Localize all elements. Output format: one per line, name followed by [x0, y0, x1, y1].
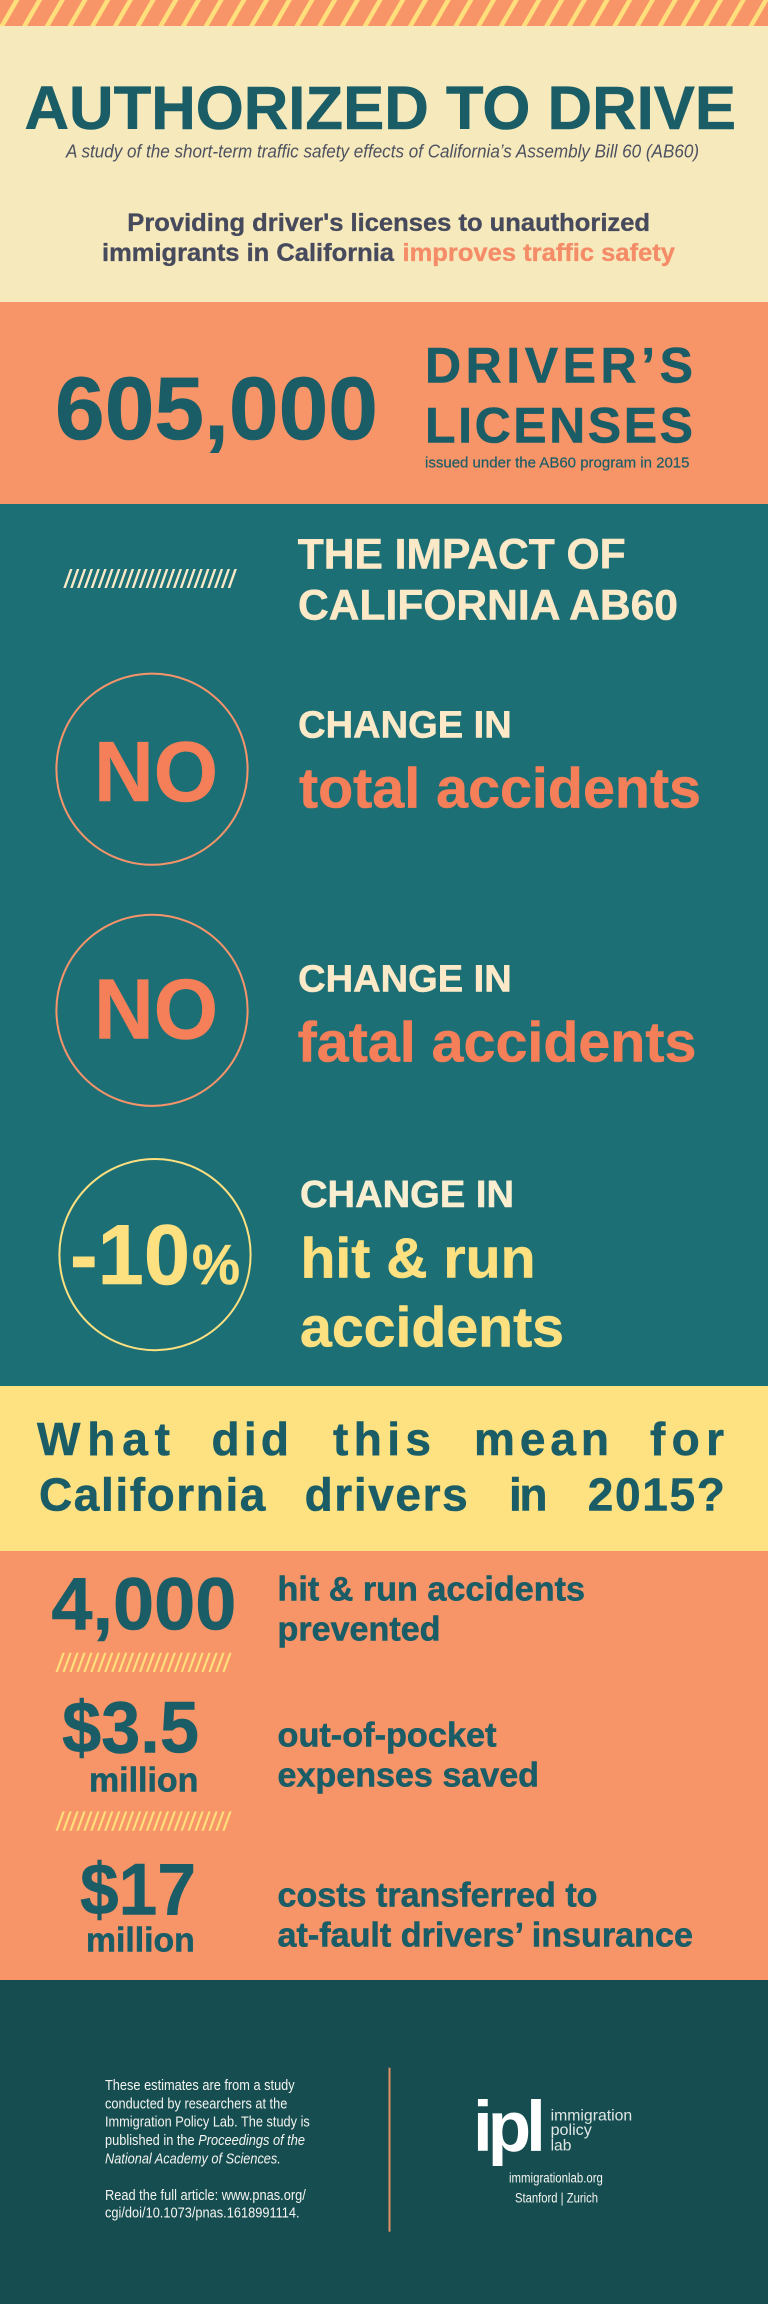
subtitle: A study of the short-term traffic safety effects of California’s Assembly Bill 60 (AB60) [65, 142, 699, 162]
key finding statement [102, 209, 675, 267]
heading: drivers [305, 1469, 468, 1521]
source text: cgi/doi/10.1073/pnas.1618991114. [105, 2206, 300, 2222]
big number: 605,000: 605,000 [55, 358, 378, 458]
stat: $3.5 million out-of-pocket expenses saved: out-of-pocket [278, 1717, 496, 1755]
label: hit and run accidents: hit & run [300, 1226, 536, 1290]
website and affiliations [509, 2171, 603, 2206]
stat: -10% change in hit and run accidents [59, 1159, 564, 1359]
circle badge: NO: NO [94, 963, 218, 1058]
vertical divider [388, 2068, 390, 2232]
circle badge: NO [56, 915, 248, 1106]
source text [105, 2078, 310, 2222]
label: hit and run accidents: accidents [300, 1295, 564, 1359]
circle badge: -10%: -10 [70, 1208, 190, 1303]
stat: $17 million costs transferred: costs transferred to [278, 1877, 598, 1915]
panel: results for drivers [0, 1551, 768, 1980]
panel: footer [0, 1980, 768, 2304]
source text: Immigration Policy Lab. The study is [105, 2115, 310, 2131]
website and affiliations: immigrationlab.org [509, 2171, 603, 2186]
logo: ipl: ipl [473, 2088, 541, 2167]
label: fatal accidents: CHANGE IN [298, 958, 512, 1000]
heading: did [212, 1413, 289, 1465]
label: hit and run accidents [300, 1174, 564, 1359]
key finding statement: Providing driver's licenses to unauthorized [127, 209, 650, 237]
heading [37, 1413, 725, 1521]
stat: 4,000 hit and run accidents prevented: 4,000 [51, 1562, 236, 1645]
title: AUTHORIZED TO DRIVE [24, 74, 736, 143]
heading: the impact [298, 530, 678, 629]
label: fatal accidents: fatal accidents [298, 1010, 696, 1074]
heading: driver's licenses [425, 337, 693, 454]
label: total accidents: total accidents [299, 756, 701, 820]
stat: $3.5 million out-of-pocket expenses saved: million [89, 1762, 198, 1800]
stat: 4,000 hit and run accidents prevented: hit & run accidents [278, 1571, 585, 1609]
logo: ipl: immigration [551, 2107, 632, 2124]
stat: $3.5 million out-of-pocket expenses saved: $3.5 [62, 1688, 199, 1769]
circle badge: -10%: % [192, 1233, 240, 1297]
heading: this [333, 1413, 431, 1465]
panel: impact of AB60 [0, 504, 768, 1386]
panel: top diagonal stripe band [0, 0, 768, 26]
logo: ipl [473, 2088, 632, 2167]
heading: for [650, 1413, 724, 1465]
label: hit and run accidents: CHANGE IN [300, 1174, 514, 1216]
source text: National Academy of Sciences. [105, 2151, 281, 2167]
website and affiliations: Stanford | Zurich [515, 2191, 598, 2206]
heading: the impact: CALIFORNIA AB60 [298, 581, 678, 629]
stat: $17 million costs transferred: million [86, 1922, 195, 1960]
stat: $3.5 million out-of-pocket expenses saved: expenses saved [278, 1757, 539, 1795]
stat: 4,000 hit and run accidents prevented [51, 1562, 585, 1649]
panel: title header [0, 26, 768, 302]
hatch mark [63, 569, 237, 588]
stat: $3.5 million out-of-pocket expenses saved [62, 1688, 539, 1800]
source text: These estimates are from a study [105, 2078, 295, 2094]
label: total accidents [298, 704, 701, 820]
source text: conducted by researchers at the [105, 2096, 287, 2112]
stat: no change in total accidents [56, 674, 701, 865]
stat: $17 million costs transferred: $17 [80, 1849, 196, 1930]
heading: 2015? [588, 1469, 725, 1521]
key finding statement: improves traffic safety [402, 239, 675, 267]
source text: published in the Proceedings of the [105, 2133, 305, 2149]
heading: What [37, 1413, 170, 1465]
label: total accidents: CHANGE IN [298, 704, 512, 746]
panel: licenses issued [0, 302, 768, 504]
heading: mean [474, 1413, 609, 1465]
circle badge: -10% [59, 1159, 251, 1350]
hatch divider [56, 1811, 232, 1831]
heading: California [39, 1469, 266, 1521]
key finding statement: immigrants in California [102, 239, 395, 267]
circle badge: NO [56, 674, 248, 865]
logo: ipl: lab [551, 2138, 572, 2155]
heading: driver's licenses: DRIVER’S [425, 337, 693, 393]
heading: the impact: THE IMPACT OF [298, 530, 626, 578]
heading: driver's licenses: LICENSES [425, 398, 693, 454]
heading: in [509, 1469, 548, 1521]
logo: ipl: policy [551, 2122, 592, 2139]
label: fatal accidents [298, 958, 696, 1074]
caption: issued under the AB60 program in 2015 [425, 455, 690, 472]
stat: 4,000 hit and run accidents prevented: prevented [278, 1611, 440, 1649]
stat: $17 million costs transferred: at-fault drivers’ insurance [278, 1917, 693, 1955]
stat: $17 million costs transferred [80, 1849, 693, 1960]
stat: no change in fatal accidents [56, 915, 696, 1106]
circle badge: NO: NO [94, 725, 218, 820]
source text: Read the full article: www.pnas.org/ [105, 2188, 306, 2204]
panel: what did this mean [0, 1386, 768, 1551]
hatch divider [56, 1653, 232, 1672]
